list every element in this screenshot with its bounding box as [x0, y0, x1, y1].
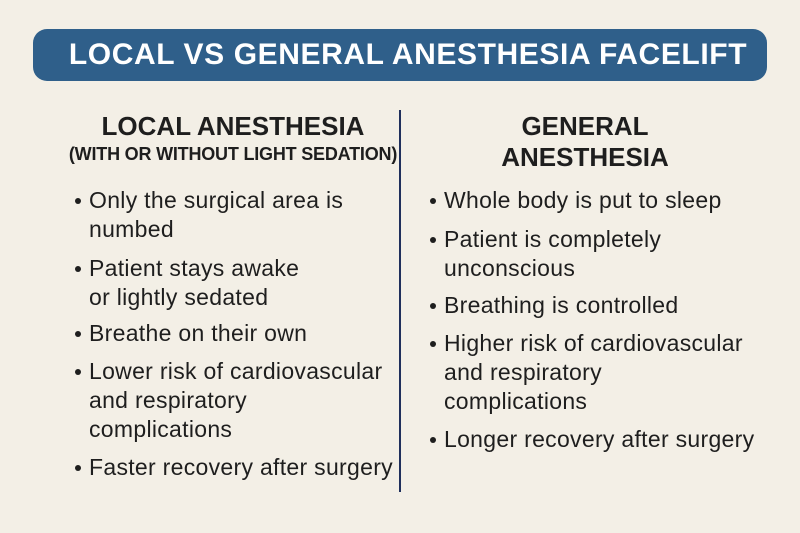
heading: general anesthesia — [501, 111, 669, 172]
heading: local anesthesia: (WITH OR WITHOUT LIGHT SEDATION) — [69, 144, 397, 164]
panel: general bullets: Longer recovery after surgery — [444, 426, 754, 452]
title banner — [33, 29, 767, 81]
panel: general bullets: unconscious — [444, 255, 575, 281]
panel: local bullets: numbed — [89, 216, 174, 242]
panel: general bullets: Patient is completely — [444, 226, 661, 252]
panel: local bullets: Only the surgical area is — [89, 187, 343, 213]
panel: general bullets: Higher risk of cardiovascular — [444, 330, 743, 356]
title banner: LOCAL VS GENERAL ANESTHESIA FACELIFT — [69, 38, 747, 71]
heading: local anesthesia — [69, 111, 397, 164]
panel: general bullets — [430, 187, 754, 452]
panel: local bullets — [75, 187, 393, 480]
panel: general bullets: Whole body is put to sleep — [444, 187, 722, 213]
heading: local anesthesia: LOCAL ANESTHESIA — [102, 111, 364, 141]
heading: general anesthesia: ANESTHESIA — [501, 142, 669, 172]
panel: local bullets: Faster recovery after surgery — [89, 454, 393, 480]
panel: local bullets: or lightly sedated — [89, 284, 268, 310]
panel: local bullets: Lower risk of cardiovascular — [89, 358, 382, 384]
panel: general bullets: Breathing is controlled — [444, 292, 678, 318]
panel: local bullets: complications — [89, 416, 232, 442]
panel: local bullets: Breathe on their own — [89, 320, 307, 346]
panel: local bullets: and respiratory — [89, 387, 247, 413]
panel: general bullets: complications — [444, 388, 587, 414]
panel: general bullets: and respiratory — [444, 359, 602, 385]
heading: general anesthesia: GENERAL — [521, 111, 649, 141]
panel: local bullets: Patient stays awake — [89, 255, 299, 281]
